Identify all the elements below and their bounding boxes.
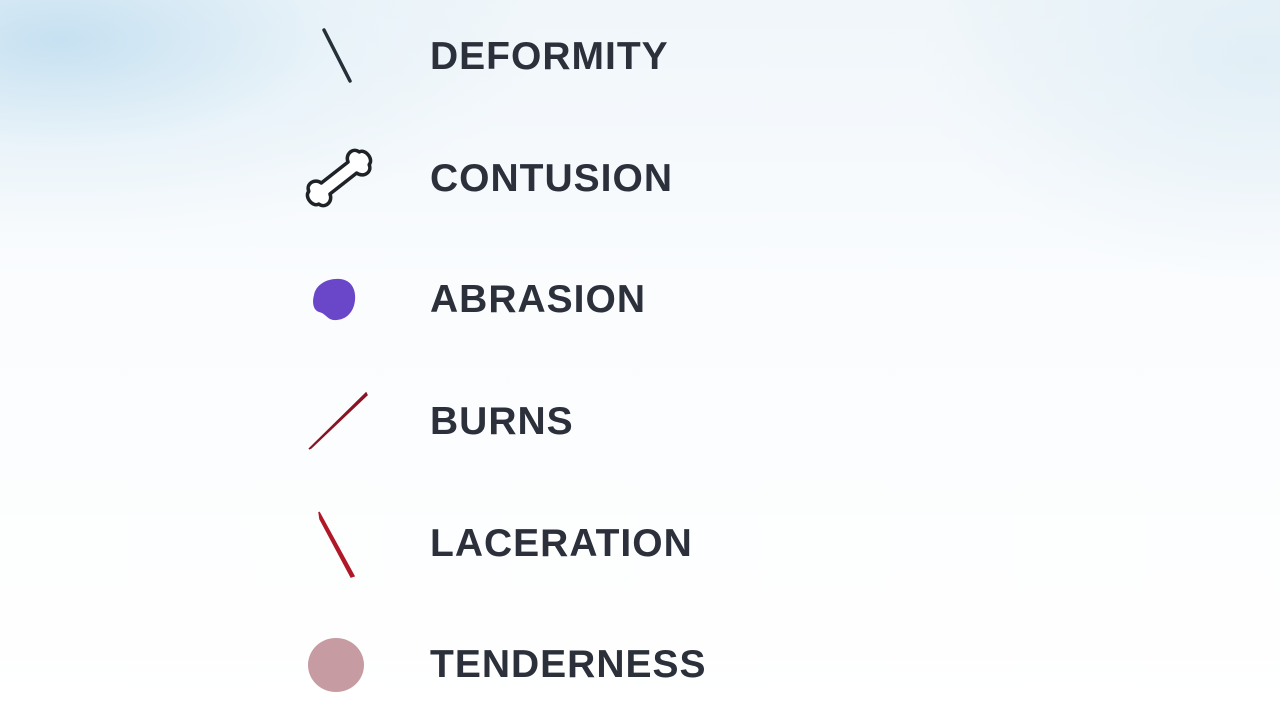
icon: purple blob: [313, 278, 356, 320]
icon: laceration cut: [318, 512, 355, 578]
label: abrasion: ABRASION: [430, 278, 646, 321]
row: deformity: [322, 28, 669, 83]
label: burns: BURNS: [430, 400, 574, 443]
row: laceration: [318, 512, 693, 578]
icon: deformity line: [322, 28, 352, 83]
row: burns: [308, 392, 574, 450]
icon: red slash: [308, 392, 368, 450]
label: deformity: DEFORMITY: [430, 35, 669, 78]
label: contusion: CONTUSION: [430, 157, 673, 200]
icon: bone: [306, 148, 372, 208]
row: contusion: [306, 148, 673, 208]
label: laceration: LACERATION: [430, 522, 693, 565]
label: tenderness: TENDERNESS: [430, 643, 707, 686]
row: tenderness: [308, 638, 707, 692]
icon: pink circle: [308, 638, 364, 692]
row: abrasion: [313, 278, 646, 321]
